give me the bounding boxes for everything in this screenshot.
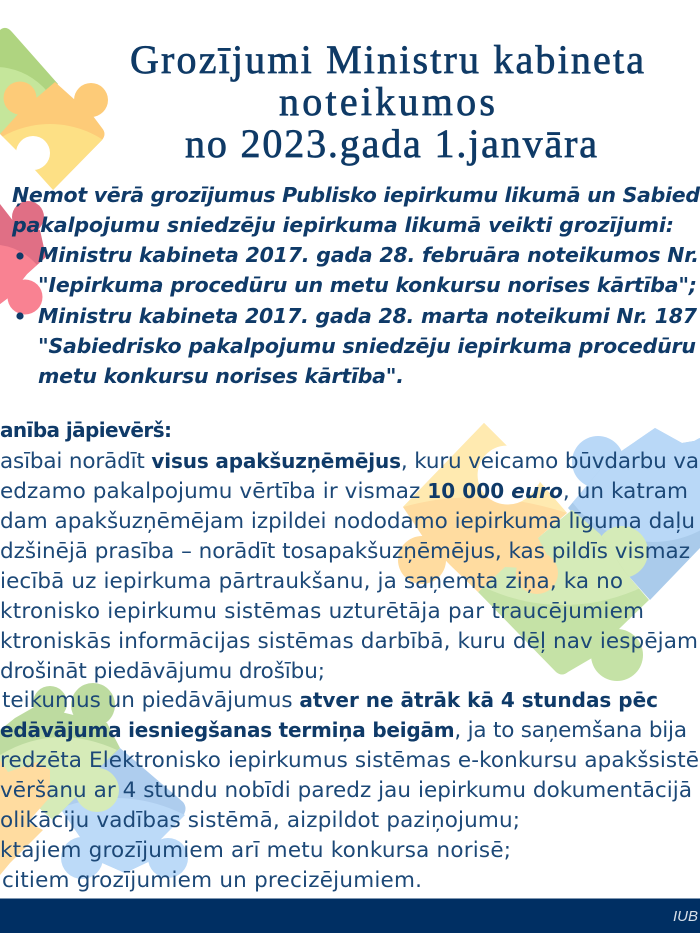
puzzle: lower left yellow piece <box>0 760 50 875</box>
attention text block: ktronisko iepirkumu sistēmas uzturētāja par traucējumiem <box>0 599 644 624</box>
attention text block: dam apakšuzņēmējam izpildei nododamo iepirkuma līguma daļu <box>0 509 695 534</box>
bullet list: "Sabiedrisko pakalpojumu sniedzēju iepirkuma procedūru <box>38 334 696 358</box>
bullet list <box>16 243 699 388</box>
attention text block <box>0 418 699 893</box>
puzzle: left pink piece <box>0 201 46 314</box>
title: no 2023.gada 1.janvāra <box>185 121 597 166</box>
puzzle: top left yellow piece <box>0 82 108 190</box>
puzzle: lower left green piece <box>0 683 120 820</box>
attention text block: citiem grozījumiem un precizējumiem. <box>2 868 422 893</box>
bullet list: Ministru kabineta 2017. gada 28. marta noteikumi Nr. 187 <box>38 304 698 328</box>
intro text block: Ņemot vērā grozījumus Publisko iepirkumu likumā un Sabied <box>12 183 700 207</box>
puzzle: middle right yellow piece <box>398 423 567 594</box>
title: noteikumos <box>279 79 495 124</box>
attention text block: drošināt piedāvājumu drošību; <box>0 659 325 684</box>
attention text block: redzēta Elektronisko iepirkumus sistēmas e-konkursu apakšsistē <box>0 748 699 773</box>
puzzle: middle right blue piece <box>568 428 700 600</box>
attention text block: edzamo pakalpojumu vērtība ir vismaz 10 000 euro, un katram <box>0 479 688 504</box>
footer bar: IUB <box>673 908 698 925</box>
bullet list: "Iepirkuma procedūru un metu konkursu norises kārtība"; <box>38 273 697 297</box>
attention text block: ktroniskās informācijas sistēmas darbībā, kuru dēļ nav iespējam <box>0 629 698 654</box>
footer bar <box>0 898 700 933</box>
attention text block: anība jāpievērš: <box>0 418 172 442</box>
attention text block: dzšinējā prasība – norādīt tosapakšuzņēmējus, kas pildīs vismaz <box>0 539 690 564</box>
attention text block: teikumus un piedāvājumus atver ne ātrāk kā 4 stundas pēc <box>2 688 658 713</box>
attention text block: edāvājuma iesniegšanas termiņa beigām, ja to saņemšana bija <box>0 718 687 743</box>
puzzle: top left green piece <box>0 28 58 136</box>
bullet list: Ministru kabineta 2017. gada 28. februāra noteikumos Nr. <box>38 243 699 267</box>
attention text block: asībai norādīt visus apakšuzņēmējus, kuru veicamo būvdarbu va <box>0 449 699 474</box>
attention text block: olikāciju vadības sistēmā, aizpildot paziņojumu; <box>0 808 520 833</box>
attention text block: iecībā uz iepirkuma pārtraukšanu, ja saņemta ziņa, ka no <box>0 569 623 594</box>
attention text block: ktajiem grozījumiem arī metu konkursa norisē; <box>0 838 511 863</box>
title <box>130 37 644 166</box>
puzzle: lower left blue piece <box>60 748 188 879</box>
bullet list: metu konkursu norises kārtība". <box>38 364 404 388</box>
attention text block: vēršanu ar 4 stundu nobīdi paredz jau iepirkumu dokumentācijā <box>0 778 692 803</box>
intro text block: pakalpojumu sniedzēju iepirkuma likumā veikti grozījumi: <box>11 213 674 237</box>
intro text block <box>11 183 700 388</box>
title: Grozījumi Ministru kabineta <box>130 37 644 82</box>
puzzle: middle right green piece <box>478 510 649 681</box>
